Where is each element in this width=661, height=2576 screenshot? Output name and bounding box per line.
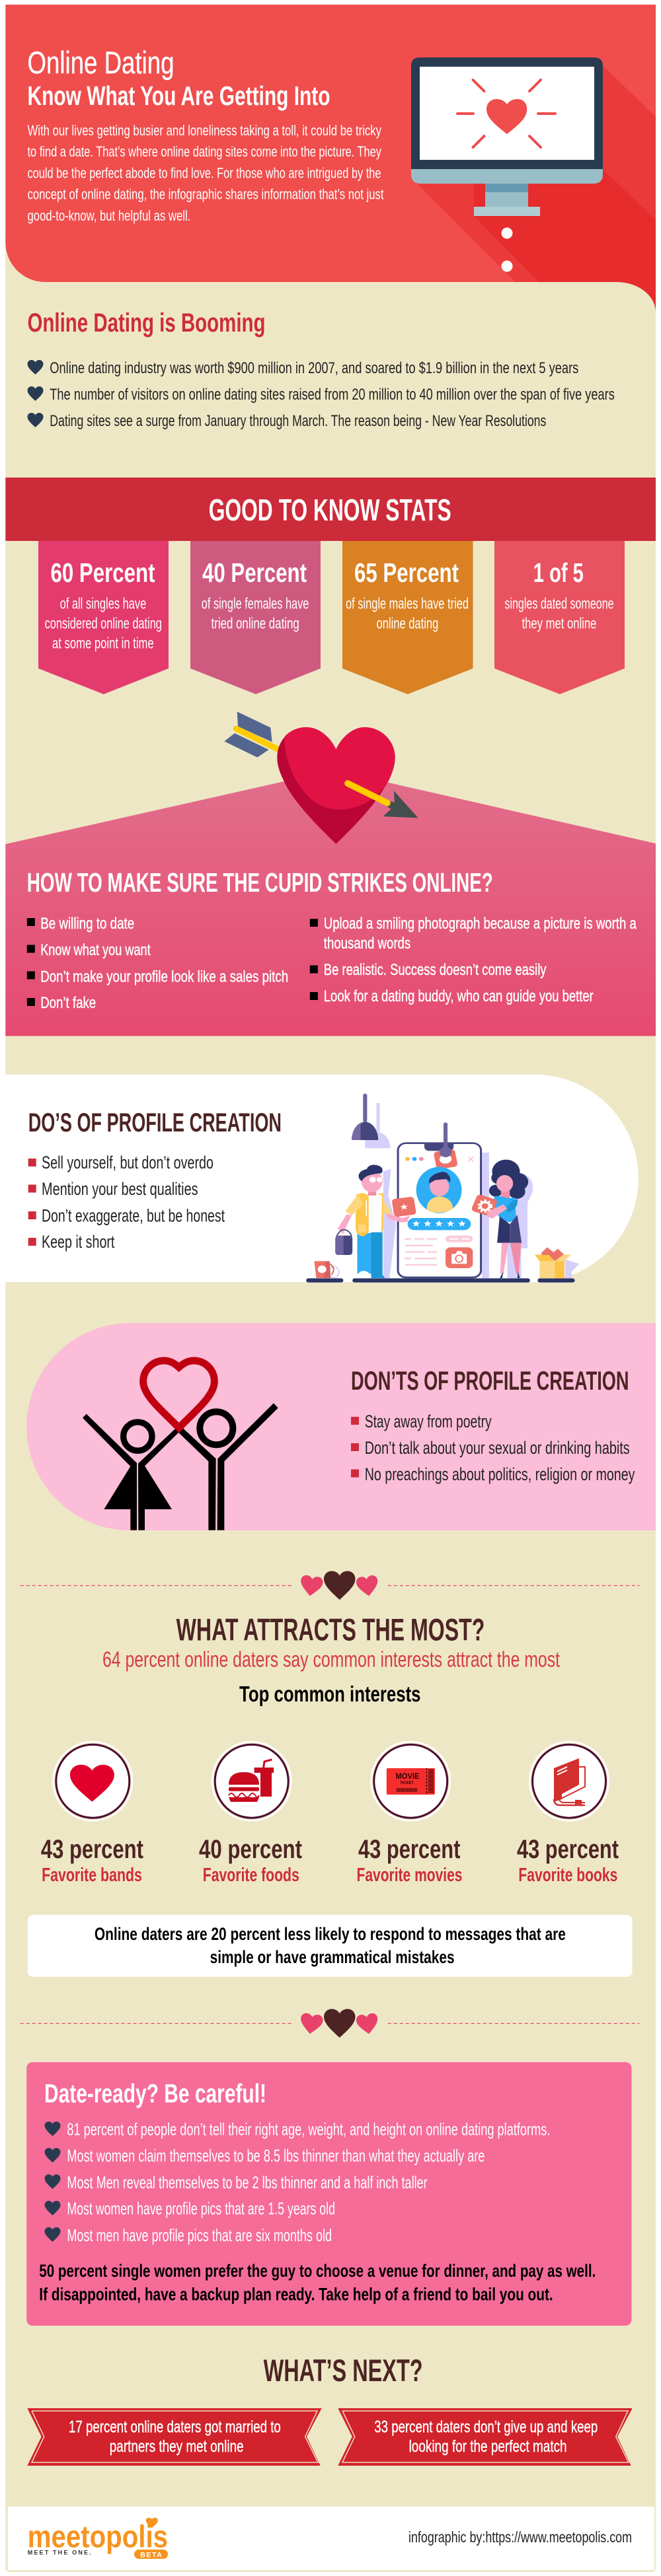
icon: burger and drink <box>212 1741 292 1822</box>
ribbon: keep looking <box>338 2408 633 2466</box>
stat card: 1 of 5: 1 of 5 <box>533 557 584 588</box>
ribbon: married <box>27 2408 322 2466</box>
list: don'ts: Stay away from poetry <box>365 1412 492 1431</box>
logo: meetopolis: MEET THE ONE. <box>28 2550 91 2556</box>
illustration: couple under heart <box>83 1361 278 1530</box>
woman <box>471 1160 528 1278</box>
stat card: 40 percent: tried online dating <box>212 614 299 631</box>
list: booming facts <box>28 359 615 430</box>
stat card: 40 percent: of single females have <box>202 595 309 612</box>
list: cupid left column <box>27 915 288 1012</box>
intro text: With our lives getting busier and loneliness taking a toll, it could be tricky <box>28 122 381 139</box>
intro text: could be the perfect abode to find love. For those who are intrigued by the <box>28 165 381 181</box>
stat card: 1 of 5: they met online <box>522 614 596 631</box>
title: Know What You Are Getting Into <box>28 81 330 111</box>
panel: cupid strikes <box>5 711 656 1036</box>
stat card: 60 percent: 60 Percent <box>50 557 155 588</box>
icon: movie ticket <box>370 1741 451 1822</box>
heading: date-ready: Date-ready? Be careful! <box>44 2079 266 2108</box>
list: cupid right column <box>310 915 637 1005</box>
ribbon: married: 17 percent online daters got married to <box>69 2418 281 2437</box>
divider: hearts <box>20 2009 640 2038</box>
logo: meetopolis: BETA <box>140 2551 162 2559</box>
stat card: 1 of 5: singles dated someone <box>504 595 614 612</box>
interest: bands <box>41 1741 143 1886</box>
text: dinner advice <box>39 2261 596 2305</box>
stat card: 60 percent: considered online dating <box>45 614 162 631</box>
logo: meetopolis: meetopolis <box>28 2519 168 2554</box>
panel: date-ready <box>26 2062 631 2326</box>
icon: heart with arrow <box>224 711 418 844</box>
interest: books <box>517 1741 619 1886</box>
man <box>335 1165 416 1278</box>
interest: foods: Favorite foods <box>203 1865 299 1886</box>
stat card: 40 percent: 40 Percent <box>202 557 307 588</box>
icon: movie ticket: TICKET <box>400 1781 414 1785</box>
stat card: 1 of 5 <box>494 541 625 694</box>
list: date-ready facts: Most women claim themselves to be 8.5 lbs thinner than what they actually are <box>67 2145 485 2165</box>
list: cupid left column: Don’t make your profile look like a sales pitch <box>40 968 288 985</box>
interest: foods: 40 percent <box>199 1835 302 1864</box>
list: date-ready facts: Most men have profile pics that are six months old <box>67 2225 332 2245</box>
panel: hero <box>5 5 656 282</box>
stat card: 40 percent <box>190 541 321 694</box>
stat card: 60 percent: of all singles have <box>60 595 146 612</box>
heading: do's: DO’S OF PROFILE CREATION <box>28 1108 282 1137</box>
mug <box>314 1261 334 1278</box>
callout: message response <box>28 1915 633 1977</box>
footer <box>8 2507 654 2570</box>
list: cupid right column: thousand words <box>324 935 410 952</box>
icon: book <box>529 1741 609 1822</box>
list: date-ready facts: Most Men reveal themselves to be 2 lbs thinner and a half inch taller <box>67 2172 428 2192</box>
list: cupid right column: Be realistic. Success doesn’t come easily <box>324 961 546 979</box>
title <box>28 45 330 111</box>
interest: books: 43 percent <box>517 1835 619 1864</box>
title: Online Dating <box>28 45 175 80</box>
monitor long shadows <box>415 65 656 282</box>
interest: bands: 43 percent <box>41 1835 143 1864</box>
stat card: 65 percent: 65 Percent <box>354 557 459 588</box>
illustration: couple with phone profile <box>306 1094 579 1283</box>
ribbon: married: partners they met online <box>110 2437 244 2456</box>
heading: what's next: WHAT’S NEXT? <box>264 2353 423 2388</box>
banner: good to know stats: GOOD TO KNOW STATS <box>209 493 451 527</box>
panel: don'ts of profile creation <box>26 1323 656 1530</box>
divider: hearts <box>20 1571 640 1600</box>
icon: heart <box>52 1741 133 1822</box>
list: do's: Don’t exaggerate, but be honest <box>42 1206 225 1226</box>
heading: online dating is booming: Online Dating is Booming <box>28 308 266 338</box>
interest: movies <box>357 1741 463 1886</box>
list: do's: Sell yourself, but don’t overdo <box>42 1153 214 1172</box>
stat card: 60 percent: at some point in time <box>52 634 154 651</box>
list: do's: Keep it short <box>42 1232 115 1252</box>
intro text: good-to-know, but helpful as well. <box>28 207 190 224</box>
box <box>535 1247 571 1278</box>
callout: message response: simple or have grammatical mistakes <box>210 1947 455 1967</box>
intro text: concept of online dating, the infographic shares information that’s not just <box>28 186 383 202</box>
list: date-ready facts <box>45 2120 550 2245</box>
list: cupid left column: Know what you want <box>40 941 151 959</box>
interest: books: Favorite books <box>518 1865 617 1886</box>
list: cupid left column: Don’t fake <box>40 994 96 1012</box>
heading: what attracts the most: WHAT ATTRACTS THE MOST? <box>176 1612 485 1647</box>
intro text: to find a date. That’s where online dating sites come into the picture. They <box>28 143 381 160</box>
interest: foods <box>199 1741 302 1886</box>
stat card: 60 percent <box>38 541 169 694</box>
banner: good to know stats <box>5 478 656 541</box>
list: cupid left column: Be willing to date <box>40 915 134 933</box>
ribbon: keep looking: looking for the perfect match <box>409 2437 567 2456</box>
list: do's: Mention your best qualities <box>42 1179 198 1199</box>
interest: bands: Favorite bands <box>42 1865 142 1886</box>
subheading: top common interests: Top common interests <box>239 1682 420 1706</box>
list: date-ready facts: Most women have profile pics that are 1.5 years old <box>67 2199 335 2219</box>
stat card: 65 percent <box>342 541 473 694</box>
icon: monitor with heart <box>411 57 603 272</box>
intro text <box>28 122 383 224</box>
icon: movie ticket: MOVIE <box>395 1771 419 1781</box>
panel: do's of profile creation <box>5 1075 639 1283</box>
stat card: 65 percent: of single males have tried <box>346 595 469 612</box>
interest: movies: 43 percent <box>358 1835 460 1864</box>
list: don'ts <box>351 1412 635 1484</box>
interest: movies: Favorite movies <box>357 1865 463 1886</box>
list: do's <box>28 1153 225 1252</box>
stat card: 65 percent: online dating <box>377 614 438 631</box>
